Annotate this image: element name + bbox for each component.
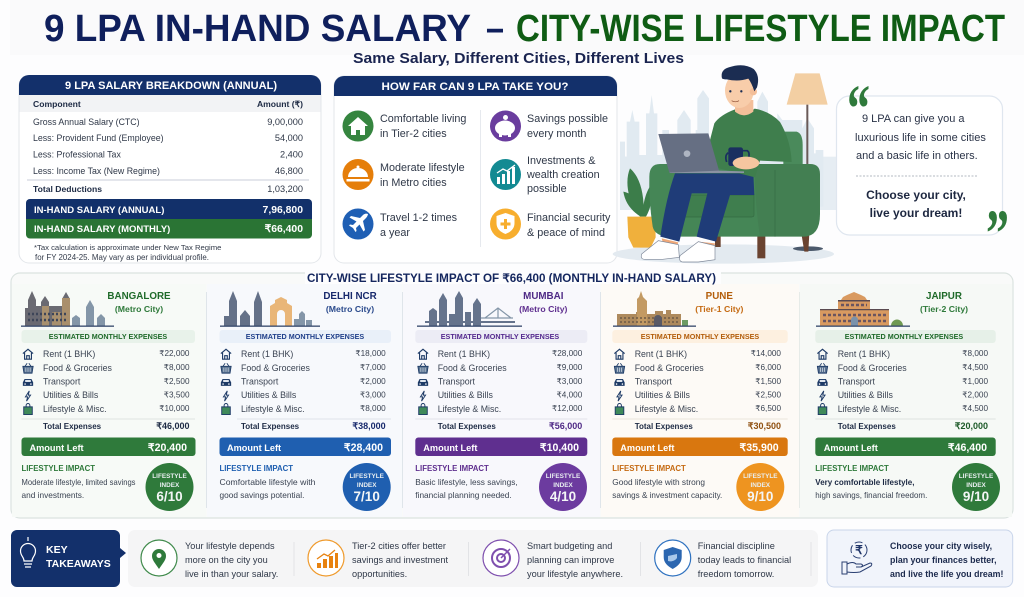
- city name: MUMBAI: [523, 291, 564, 302]
- amount left bar: [612, 438, 788, 456]
- lifestyle index badge: LIFESTYLE: [546, 473, 581, 480]
- lifestyle index badge: 9/10: [747, 489, 773, 504]
- takeaway 1: [185, 541, 278, 579]
- expense rows: ₹8,000: [360, 404, 386, 413]
- sweater: [710, 109, 792, 177]
- section heading: [305, 268, 721, 285]
- lifestyle index badge: [146, 463, 194, 511]
- amount left bar: [415, 438, 587, 456]
- expense rows: ₹30,500: [748, 421, 781, 431]
- lifestyle impact: savings & investment capacity.: [612, 490, 722, 500]
- takeaway 1: Your lifestyle depends: [185, 541, 275, 551]
- lifestyle impact: Very comfortable lifestyle,: [815, 478, 914, 487]
- takeaway 3: Smart budgeting and: [527, 541, 612, 551]
- closing message card: [827, 530, 1013, 587]
- takeaway 4: [698, 541, 791, 579]
- panel: salary breakdown: Component: [33, 99, 81, 109]
- moderate lifestyle text: in Metro cities: [380, 177, 447, 189]
- expense rows: Lifestyle & Misc.: [43, 404, 107, 414]
- closing text: Choose your city wisely,: [890, 541, 992, 551]
- legs: [660, 173, 754, 242]
- expense rows: ₹1,500: [755, 377, 781, 386]
- lifestyle impact: [22, 464, 136, 500]
- expense rows: ₹9,000: [557, 363, 583, 372]
- quote text: luxurious life in some cities: [855, 132, 986, 144]
- lifestyle impact: Good lifestyle with strong: [612, 477, 705, 487]
- lifestyle impact: LIFESTYLE IMPACT: [22, 464, 95, 473]
- city name: BANGALORE: [107, 291, 171, 302]
- lifestyle impact: LIFESTYLE IMPACT: [612, 464, 686, 473]
- expense rows: Food & Groceries: [838, 363, 907, 373]
- lifestyle index badge: LIFESTYLE: [349, 473, 385, 480]
- ankles: [662, 238, 715, 248]
- section heading: CITY-WISE LIFESTYLE IMPACT OF ₹66,400 (MONTHLY IN-HAND SALARY): [307, 273, 716, 285]
- floor lamp: [787, 73, 828, 251]
- savings text: [527, 113, 608, 140]
- travel text: Travel 1-2 times: [380, 212, 458, 224]
- laptop: [658, 133, 719, 173]
- expense rows: ₹18,000: [355, 349, 386, 358]
- expense rows: Transport: [241, 376, 279, 386]
- expenses heading: [612, 330, 788, 343]
- lifestyle impact: Moderate lifestyle, limited savings: [22, 477, 136, 487]
- comfortable living text: [380, 113, 466, 140]
- takeaway 3: planning can improve: [527, 555, 614, 565]
- travel text: a year: [380, 227, 410, 239]
- panel: how far can 9 LPA take you: [334, 76, 617, 263]
- icon: rupee in hand: [842, 542, 872, 574]
- city name: [695, 291, 743, 314]
- expense rows: ₹6,500: [755, 404, 781, 413]
- expenses heading: ESTIMATED MONTHLY EXPENSES: [845, 332, 963, 341]
- expense rows: ₹38,000: [352, 421, 386, 431]
- city name: (Tier-1 City): [695, 304, 743, 314]
- panel header: [334, 76, 617, 96]
- takeaway 1: more on the city you: [185, 555, 268, 565]
- hair: [722, 65, 758, 91]
- lifestyle index badge: LIFESTYLE: [959, 473, 994, 480]
- investments text: Investments &: [527, 155, 596, 167]
- panel: salary breakdown: Less: Professional Tax: [33, 150, 121, 160]
- amount left bar: ₹35,900: [740, 442, 779, 454]
- key takeaways tag: [11, 530, 126, 587]
- expense rows: ₹4,500: [962, 404, 988, 413]
- takeaway 2: Tier-2 cities offer better: [352, 541, 446, 551]
- man: [641, 65, 792, 262]
- expense rows: ₹3,000: [557, 377, 583, 386]
- title: –: [486, 8, 504, 50]
- lifestyle index badge: INDEX: [357, 482, 377, 489]
- quote text: Choose your city,: [866, 188, 966, 202]
- panel: salary breakdown: 1,03,200: [267, 184, 303, 194]
- expense rows: Utilities & Bills: [838, 390, 894, 400]
- lifestyle index badge: LIFESTYLE: [152, 473, 187, 480]
- quote text: live your dream!: [870, 206, 962, 220]
- icon: rupee in hand: ₹: [855, 543, 863, 557]
- panel: salary breakdown: Less: Income Tax (New Regime): [33, 166, 160, 176]
- financial security text: & peace of mind: [527, 227, 605, 239]
- takeaway 4: Financial discipline: [698, 541, 775, 551]
- skyline: Jaipur: [816, 292, 910, 327]
- lifestyle impact: good savings potential.: [220, 490, 304, 500]
- expense rows: [22, 349, 195, 431]
- icon: home: [342, 110, 374, 142]
- lifestyle index badge: [539, 463, 587, 511]
- icon: piggy bank: [490, 110, 521, 142]
- icon: light bulb: [20, 537, 36, 567]
- expense rows: ₹12,000: [552, 404, 583, 413]
- expense rows: ₹46,000: [156, 421, 190, 431]
- city: Mumbai: [415, 291, 587, 511]
- closing text: and live the life you dream!: [890, 569, 1003, 579]
- quote text: and a basic life in others.: [856, 150, 978, 162]
- icon: location pin: [141, 540, 177, 576]
- expense rows: Lifestyle & Misc.: [635, 404, 698, 414]
- amount left bar: ₹20,400: [148, 442, 187, 454]
- lifestyle index badge: 6/10: [156, 489, 183, 504]
- panel: salary breakdown: Amount (₹): [257, 99, 303, 109]
- panel: salary breakdown: 9,00,000: [267, 117, 303, 127]
- amount left bar: Amount Left: [824, 443, 878, 453]
- expense rows: Food & Groceries: [635, 363, 704, 373]
- expense rows: Food & Groceries: [43, 363, 113, 373]
- skyline: Bangalore: [21, 291, 114, 327]
- city: Jaipur: [815, 291, 1000, 511]
- panel: salary breakdown: for FY 2024-25. May vary as per individual profile.: [35, 253, 209, 262]
- icon: growth chart: [490, 159, 521, 190]
- lifestyle impact: and investments.: [22, 490, 84, 500]
- lifestyle impact: LIFESTYLE IMPACT: [415, 464, 489, 473]
- in-hand monthly row: ₹66,400: [265, 224, 303, 235]
- armchair: [649, 132, 820, 258]
- lifestyle impact: [220, 464, 316, 500]
- lifestyle index badge: INDEX: [160, 482, 180, 489]
- lifestyle index badge: 7/10: [354, 489, 380, 504]
- expense rows: Transport: [438, 376, 476, 386]
- in-hand annual row: [26, 199, 312, 219]
- neck and head: [735, 100, 753, 115]
- lifestyle index badge: INDEX: [553, 482, 574, 489]
- expense rows: Utilities & Bills: [438, 390, 494, 400]
- expense rows: ₹22,000: [159, 349, 190, 358]
- ground shadow: [613, 244, 834, 264]
- lifestyle index badge: [736, 463, 784, 511]
- investments text: possible: [527, 183, 567, 195]
- expense rows: ₹10,000: [159, 404, 190, 413]
- in-hand annual row: IN-HAND SALARY (ANNUAL): [34, 205, 164, 216]
- lifestyle impact: [815, 464, 927, 500]
- lifestyle index badge: LIFESTYLE: [743, 473, 778, 480]
- takeaway 1: live in than your salary.: [185, 569, 278, 579]
- amount left bar: ₹28,400: [344, 442, 383, 454]
- expense rows: ₹2,000: [360, 377, 386, 386]
- city name: PUNE: [706, 291, 733, 302]
- expenses heading: [22, 330, 195, 343]
- icon: service bell: [342, 159, 374, 190]
- city name: [107, 291, 171, 314]
- expense rows: [612, 349, 788, 431]
- city: Pune: [612, 291, 788, 511]
- expense rows: ₹8,000: [164, 363, 190, 372]
- expense rows: ₹4,500: [962, 363, 988, 372]
- city name: DELHI NCR: [323, 291, 377, 302]
- panel: salary breakdown: [19, 75, 321, 263]
- lifestyle impact: high savings, financial freedom.: [815, 490, 927, 500]
- city name: [519, 291, 568, 314]
- icon: shield: [655, 540, 691, 576]
- skyline: Delhi: [220, 291, 320, 327]
- expense rows: ₹4,000: [557, 390, 583, 400]
- panel: salary breakdown: Total Deductions: [33, 184, 102, 194]
- lifestyle impact: LIFESTYLE IMPACT: [220, 464, 293, 473]
- takeaway 4: freedom tomorrow.: [698, 569, 774, 579]
- panel: salary breakdown: 46,800: [275, 166, 303, 176]
- expense rows: ₹1,000: [962, 377, 988, 386]
- salary header: 9 LPA SALARY BREAKDOWN (ANNUAL): [65, 80, 277, 92]
- expense rows: ₹20,000: [955, 421, 988, 431]
- quote mark open: “: [847, 70, 870, 146]
- amount left bar: Amount Left: [227, 443, 281, 453]
- expense rows: Transport: [43, 376, 81, 386]
- savings text: Savings possible: [527, 113, 608, 125]
- city name: [920, 291, 968, 314]
- lifestyle index badge: [952, 463, 1000, 511]
- travel text: [380, 212, 458, 239]
- financial security text: [527, 212, 611, 239]
- amount left bar: Amount Left: [30, 443, 84, 453]
- icon: plane: [342, 208, 374, 240]
- expense rows: Transport: [838, 376, 876, 386]
- panel: salary breakdown: Less: Provident Fund (Employee): [33, 133, 164, 143]
- expense rows: Rent (1 BHK): [635, 349, 687, 359]
- expense rows: ₹8,000: [962, 349, 988, 358]
- amount left bar: ₹46,400: [948, 442, 987, 454]
- icon: rising chart: [308, 540, 344, 576]
- expense rows: Total Expenses: [43, 422, 102, 431]
- amount left bar: ₹10,400: [540, 442, 579, 454]
- expense rows: Food & Groceries: [241, 363, 311, 373]
- expenses heading: ESTIMATED MONTHLY EXPENSES: [441, 332, 559, 341]
- lifestyle index badge: INDEX: [966, 482, 987, 489]
- investments text: [526, 155, 600, 195]
- takeaway 2: savings and investment: [352, 555, 448, 565]
- expense rows: Total Expenses: [241, 422, 300, 431]
- lifestyle index badge: 9/10: [963, 489, 989, 504]
- panel header: HOW FAR CAN 9 LPA TAKE YOU?: [382, 81, 569, 93]
- expense rows: Total Expenses: [838, 422, 896, 431]
- expense rows: ₹2,500: [755, 390, 781, 400]
- expense rows: Rent (1 BHK): [241, 349, 293, 359]
- expense rows: Rent (1 BHK): [838, 349, 890, 359]
- lifestyle impact: Comfortable lifestyle with: [220, 477, 316, 487]
- icon: target: [483, 540, 519, 576]
- in-hand annual row: 7,96,800: [263, 205, 303, 216]
- lifestyle impact: financial planning needed.: [415, 490, 512, 500]
- amount left bar: Amount Left: [620, 443, 674, 453]
- expense rows: ₹6,000: [755, 363, 781, 372]
- city name: JAIPUR: [926, 291, 962, 302]
- expense rows: Utilities & Bills: [43, 390, 99, 400]
- expense rows: Transport: [635, 376, 673, 386]
- expense rows: Total Expenses: [635, 422, 693, 431]
- expenses heading: [415, 330, 587, 343]
- closing text: plan your finances better,: [890, 555, 997, 565]
- key takeaways tag: KEY: [46, 544, 68, 556]
- expenses heading: ESTIMATED MONTHLY EXPENSES: [246, 332, 364, 341]
- expense rows: Lifestyle & Misc.: [838, 404, 901, 414]
- expenses heading: ESTIMATED MONTHLY EXPENSES: [49, 332, 167, 341]
- salary header: [19, 75, 321, 95]
- panel: city-wise lifestyle impact: [11, 268, 1013, 518]
- panel: salary breakdown: 54,000: [275, 133, 303, 143]
- illustration: man on armchair with laptop: [613, 65, 836, 264]
- city name: (Metro City): [519, 304, 568, 314]
- city: Bangalore: [21, 291, 196, 511]
- title: [10, 0, 1024, 55]
- key takeaways tag: TAKEAWAYS: [46, 558, 111, 570]
- panel: salary breakdown: 2,400: [280, 150, 303, 160]
- quote mark close: ”: [986, 195, 1009, 271]
- expenses heading: [815, 330, 996, 343]
- expense rows: ₹2,500: [164, 377, 190, 386]
- subtitle: Same Salary, Different Cities, Different Lives: [353, 50, 684, 67]
- comfortable living text: Comfortable living: [380, 113, 466, 125]
- lifestyle index badge: INDEX: [751, 482, 771, 489]
- lifestyle impact: [415, 464, 518, 500]
- hand: [733, 157, 759, 169]
- expense rows: [415, 349, 587, 431]
- expense rows: ₹56,000: [549, 421, 582, 431]
- expense rows: Lifestyle & Misc.: [438, 404, 501, 414]
- lifestyle index badge: [343, 463, 391, 511]
- skyline: Mumbai: [417, 291, 522, 327]
- city name: (Tier-2 City): [920, 304, 968, 314]
- expense rows: Utilities & Bills: [241, 390, 297, 400]
- moderate lifestyle text: [380, 162, 465, 189]
- expense rows: Food & Groceries: [438, 363, 507, 373]
- lifestyle impact: [612, 464, 722, 500]
- expense rows: ₹14,000: [751, 349, 781, 358]
- expenses heading: ESTIMATED MONTHLY EXPENSES: [641, 332, 759, 341]
- mug: [728, 147, 743, 166]
- eyes and smile: [729, 90, 731, 92]
- title: 9 LPA IN-HAND SALARY: [44, 8, 471, 50]
- takeaway 2: [352, 541, 448, 579]
- takeaways strip: [128, 530, 818, 587]
- lifestyle impact: LIFESTYLE IMPACT: [815, 464, 889, 473]
- shoes: [641, 241, 679, 259]
- comfortable living text: in Tier-2 cities: [380, 128, 447, 140]
- takeaway 4: today leads to financial: [698, 555, 791, 565]
- expense rows: Utilities & Bills: [635, 390, 691, 400]
- quote text: [855, 113, 986, 220]
- expense rows: Total Expenses: [438, 422, 496, 431]
- financial security text: Financial security: [527, 212, 611, 224]
- city name: (Metro City): [326, 304, 374, 314]
- in-hand monthly row: IN-HAND SALARY (MONTHLY): [34, 224, 170, 235]
- in-hand monthly row: [26, 219, 312, 238]
- expense rows: Lifestyle & Misc.: [241, 404, 305, 414]
- panel: salary breakdown: Gross Annual Salary (CTC): [33, 117, 140, 127]
- background skyline: [620, 90, 836, 210]
- city name: (Metro City): [115, 304, 163, 314]
- savings text: every month: [527, 128, 586, 140]
- expense rows: [815, 349, 996, 431]
- moderate lifestyle text: Moderate lifestyle: [380, 162, 465, 174]
- quote text: 9 LPA can give you a: [862, 113, 965, 125]
- expense rows: ₹7,000: [360, 363, 386, 372]
- amount left bar: Amount Left: [423, 443, 477, 453]
- expense rows: ₹28,000: [552, 349, 583, 358]
- potted plant: [623, 168, 656, 248]
- amount left bar: [220, 438, 391, 456]
- takeaway 3: [527, 541, 623, 579]
- expense rows: Rent (1 BHK): [438, 349, 490, 359]
- lifestyle index badge: 4/10: [550, 489, 576, 504]
- amount left bar: [22, 438, 196, 456]
- expense rows: ₹2,000: [962, 390, 988, 400]
- takeaway 3: your lifestyle anywhere.: [527, 569, 623, 579]
- quote card: [836, 70, 1009, 271]
- expense rows: ₹3,500: [164, 390, 190, 400]
- investments text: wealth creation: [526, 169, 600, 181]
- city: Delhi NCR: [220, 291, 391, 511]
- expenses heading: [220, 330, 391, 343]
- amount left bar: [815, 438, 996, 456]
- expense rows: ₹3,000: [360, 390, 386, 400]
- panel: salary breakdown: *Tax calculation is approximate under New Tax Regime: [34, 243, 221, 252]
- closing text: [890, 541, 1003, 579]
- expense rows: Rent (1 BHK): [43, 349, 95, 359]
- skyline: Pune: [613, 291, 696, 327]
- city name: [323, 291, 377, 314]
- expense rows: [221, 349, 391, 431]
- icon: shield: [490, 208, 521, 240]
- takeaway 2: opportunities.: [352, 569, 407, 579]
- lifestyle impact: Basic lifestyle, less savings,: [415, 477, 518, 487]
